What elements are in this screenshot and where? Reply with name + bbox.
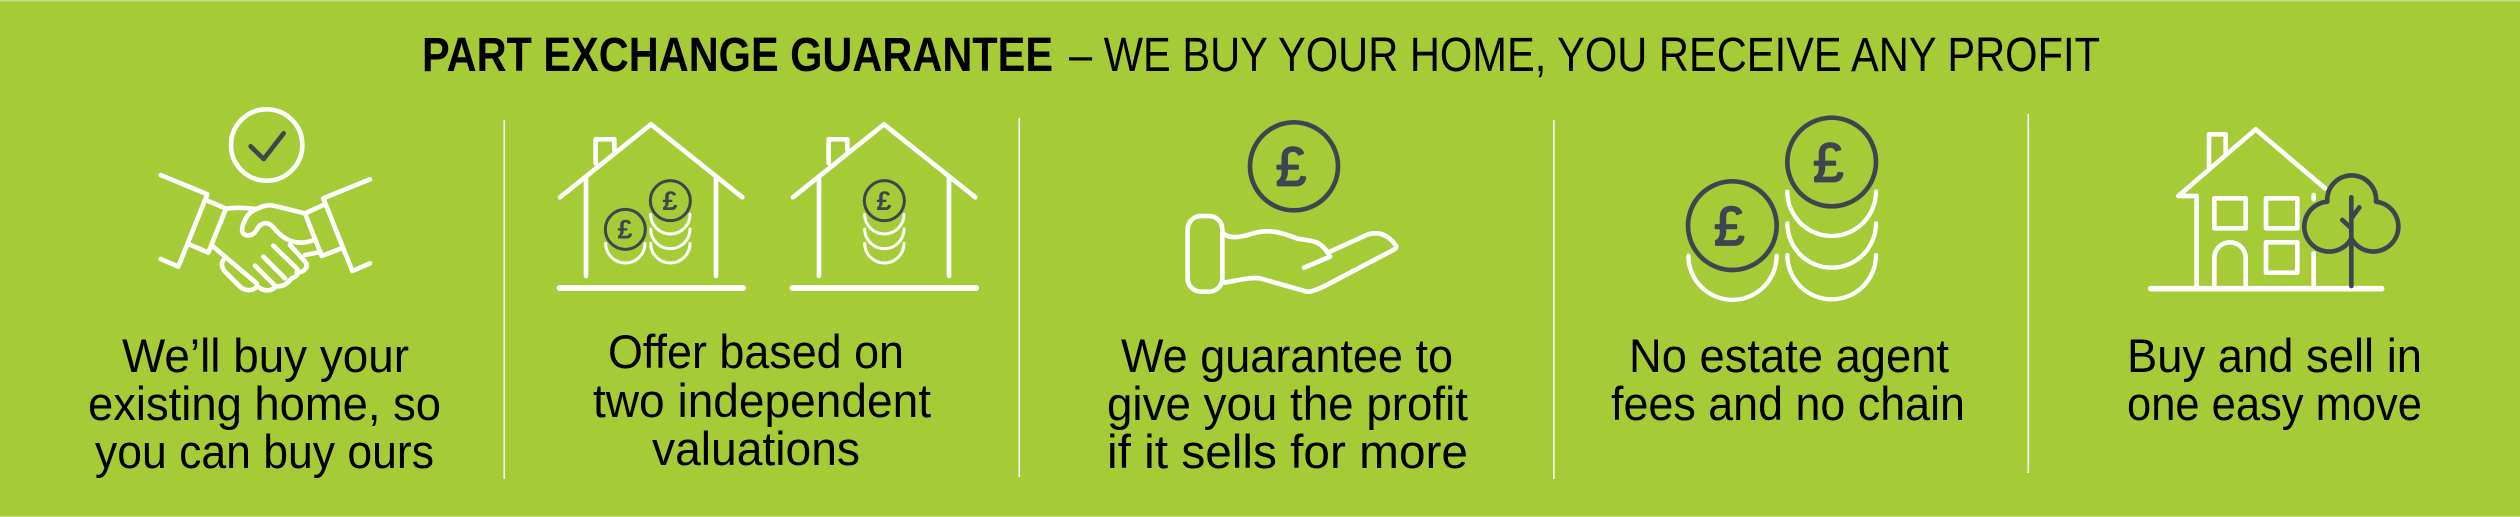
icon: right house: £ [877, 186, 892, 216]
icon: two houses with coins [559, 124, 976, 288]
text: profit guarantee: give you the profit [1107, 377, 1468, 430]
text: buy your home [88, 329, 441, 478]
title: PART EXCHANGE GUARANTEE [422, 29, 1053, 82]
icon: hand holding pound coin: £ [1276, 136, 1306, 198]
text: buy your home: We’ll buy your [122, 329, 409, 382]
title: – WE BUY YOUR HOME, YOU RECEIVE ANY PROFIT [1069, 29, 2100, 82]
text: profit guarantee: We guarantee to [1121, 329, 1453, 382]
text: one easy move: Buy and sell in [2127, 329, 2422, 382]
text: no fees: fees and no chain [1611, 377, 1965, 430]
icon: hand holding pound coin [1188, 122, 1396, 292]
icon: house with tree [2151, 129, 2398, 289]
text: one easy move: one easy move [2127, 377, 2422, 430]
text: two valuations: two independent [593, 374, 931, 427]
icon: stacks of pound coins [1688, 118, 1876, 300]
title [422, 29, 2100, 82]
text: no fees [1611, 329, 1965, 430]
panel: buy your home [88, 109, 441, 478]
icon: left house [559, 124, 743, 288]
icon: left house: £ [663, 186, 678, 216]
panel: profit guarantee [1107, 122, 1468, 478]
panel: no fees [1611, 118, 1965, 430]
text: one easy move [2127, 329, 2422, 430]
text: buy your home: existing home, so [88, 377, 441, 430]
text: two valuations: Offer based on [608, 325, 904, 378]
text: two valuations: valuations [652, 422, 860, 475]
text: buy your home: you can buy ours [95, 425, 434, 478]
icon: handshake with check mark [161, 109, 370, 290]
text: no fees: No estate agent [1629, 329, 1949, 382]
text: profit guarantee [1107, 329, 1468, 478]
icon: right house [792, 124, 976, 288]
icon: left house: £ [618, 215, 633, 245]
icon: stacks of pound coins: £ [1714, 195, 1745, 257]
text: profit guarantee: if it sells for more [1107, 425, 1468, 478]
text: two valuations [593, 325, 931, 475]
panel: one easy move [2127, 129, 2422, 430]
panel: two valuations [559, 124, 976, 475]
icon: stacks of pound coins: £ [1813, 132, 1844, 194]
